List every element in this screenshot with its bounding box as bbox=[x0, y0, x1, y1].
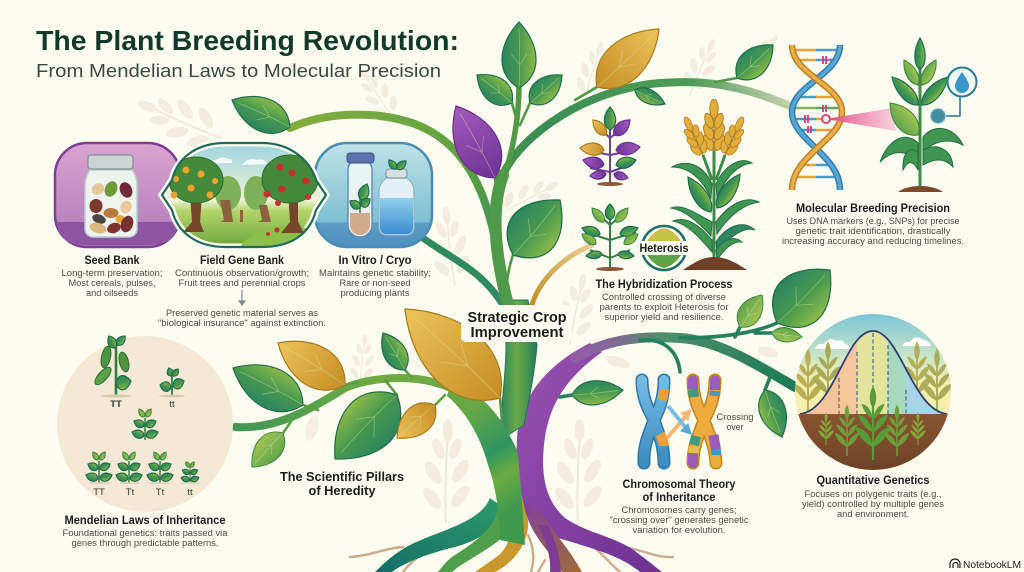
panel: seed bank bbox=[55, 143, 180, 247]
title: The Plant Breeding Revolution: bbox=[36, 25, 459, 56]
text: scientific pillars: of Heredity bbox=[308, 483, 376, 498]
text: biological insurance note: Preserved genetic material serves as bbox=[166, 308, 318, 319]
background ghost sprigs bbox=[129, 27, 788, 522]
branch: in vitro link bbox=[423, 238, 503, 305]
root: teal bbox=[375, 498, 504, 572]
text: mendelian laws bbox=[62, 515, 228, 549]
icon: seed jar bbox=[85, 155, 137, 237]
icon: F1 plant bbox=[131, 408, 159, 440]
icon: crossed chromosome bbox=[693, 380, 716, 463]
branch: lower left bbox=[235, 378, 472, 427]
label: strategic crop improvement bbox=[461, 305, 572, 342]
text: quantitative genetics bbox=[802, 475, 944, 520]
icon: bottle bbox=[379, 158, 414, 235]
text: in vitro cryo bbox=[319, 255, 431, 299]
icon: water drop badge bbox=[930, 68, 976, 124]
icon: molecular plant bbox=[880, 38, 963, 192]
icon: F2 plants bbox=[85, 451, 200, 483]
root: gold bbox=[475, 490, 528, 572]
text: hybridization process bbox=[596, 279, 732, 323]
text: chromosomal theory: of Inheritance bbox=[642, 492, 716, 504]
text: F2 labels: Tt bbox=[156, 487, 165, 498]
text: field gene bank: Continuous observation/growth; bbox=[175, 268, 309, 279]
badge: heterosis bbox=[638, 226, 690, 270]
text: scientific pillars: The Scientific Pillars bbox=[280, 469, 404, 484]
wheat heads bbox=[701, 99, 727, 152]
text: seed bank: and oilseeds bbox=[86, 288, 138, 299]
text: hybridization process: Controlled crossing of diverse bbox=[602, 292, 726, 303]
text: field gene bank: Field Gene Bank bbox=[200, 255, 285, 267]
panel: quantitative genetics circle bbox=[792, 314, 952, 474]
subtitle: From Mendelian Laws to Molecular Precision bbox=[36, 60, 441, 81]
text: quantitative genetics: yield) controlled by multiple genes bbox=[802, 499, 944, 510]
text: F2 labels: TT bbox=[93, 487, 105, 498]
icon: hybrid wheat plant bbox=[671, 99, 759, 270]
icon: green parent plant bbox=[580, 204, 640, 271]
text: biological insurance note: "biological insurance" against extinction. bbox=[158, 318, 326, 329]
text: quantitative genetics: Quantitative Genetics bbox=[816, 475, 930, 487]
text: seed bank: Most cereals, pulses, bbox=[68, 278, 156, 289]
text: hybridization process: superior yield and resilience. bbox=[604, 312, 724, 323]
text: F2 labels bbox=[93, 487, 193, 498]
text: in vitro cryo: Rare or non-seed bbox=[340, 278, 410, 289]
leaves of the tree bbox=[223, 14, 849, 478]
text: scientific pillars bbox=[280, 469, 404, 498]
text: mendelian laws: Foundational genetics: traits passed via bbox=[62, 528, 228, 539]
label: strategic crop improvement: Improvement bbox=[470, 324, 564, 341]
branches bbox=[235, 78, 795, 433]
background wheat bbox=[792, 341, 952, 412]
label: strategic crop improvement: Strategic Crop bbox=[468, 309, 566, 326]
panel: mendelian circle bbox=[57, 334, 233, 512]
branch: top stem bbox=[498, 85, 519, 190]
badge: heterosis: Heterosis bbox=[640, 243, 688, 255]
text: hybridization process: The Hybridization Process bbox=[596, 279, 732, 291]
label: crossing over: over bbox=[726, 422, 744, 433]
arrow: down to insurance note bbox=[239, 290, 245, 305]
text: in vitro cryo: In Vitro / Cryo bbox=[338, 255, 412, 267]
branch: upper right to DNA bbox=[496, 82, 790, 320]
logo: NotebookLM: NotebookLM bbox=[963, 559, 1021, 571]
text: F2 labels: Tt bbox=[126, 487, 135, 498]
icon: purple parent plant bbox=[580, 107, 641, 186]
text: mendelian laws: Mendelian Laws of Inheritance bbox=[64, 515, 226, 527]
branch: purple right bbox=[575, 337, 795, 387]
text: seed bank bbox=[62, 255, 162, 299]
text: mendelian laws: genes through predictable patterns. bbox=[72, 538, 218, 549]
text: molecular breeding precision: Molecular Breeding Precision bbox=[796, 203, 950, 215]
text: in vitro cryo: Maintains genetic stability; bbox=[319, 268, 431, 279]
icon: blue chromosome bbox=[642, 380, 664, 463]
clouds bbox=[815, 337, 931, 349]
wheat leaves bbox=[671, 161, 759, 260]
label: crossing over bbox=[716, 412, 754, 433]
label: crossing over: Crossing bbox=[716, 412, 754, 423]
dna rungs bbox=[794, 50, 838, 177]
text: chromosomal theory: "crossing over" generates genetic bbox=[610, 515, 749, 526]
root: purple brown bbox=[523, 500, 582, 572]
text: TT tt parent labels bbox=[110, 399, 175, 410]
text: seed bank: Long-term preservation; bbox=[62, 268, 162, 279]
text: TT tt parent labels: TT bbox=[110, 399, 122, 410]
text: F2 labels: tt bbox=[187, 487, 193, 498]
panel: field gene bank bbox=[162, 143, 326, 250]
branch: upper left bbox=[290, 115, 505, 305]
root: small purple bbox=[538, 525, 561, 572]
branch: upper right thick base bbox=[496, 175, 512, 320]
text: chromosomal theory: Chromosomal Theory bbox=[622, 479, 736, 491]
bell curve bbox=[800, 331, 947, 415]
text: biological insurance note bbox=[158, 308, 326, 329]
text: field gene bank bbox=[175, 255, 309, 289]
text: molecular breeding precision bbox=[782, 203, 964, 247]
trunk base joined with lower left branch bbox=[447, 386, 525, 545]
text: quantitative genetics: and environment. bbox=[837, 509, 909, 520]
text: hybridization process: parents to exploit Heterosis for bbox=[600, 302, 729, 313]
text: chromosomal theory bbox=[610, 479, 749, 536]
arrows: crossing over bbox=[667, 406, 691, 438]
text: molecular breeding precision: genetic trait identification, drastically bbox=[796, 226, 951, 237]
icon: pink marker beam bbox=[822, 108, 896, 131]
text: in vitro cryo: producing plants bbox=[340, 288, 410, 299]
icon: DNA helix bbox=[792, 45, 842, 190]
icon: short pea plant bbox=[159, 367, 185, 397]
text: chromosomal theory: Chromosomes carry genes; bbox=[622, 505, 736, 516]
text: molecular breeding precision: increasing accuracy and reducing timelines. bbox=[782, 236, 964, 247]
central trunk bbox=[500, 300, 537, 440]
text: seed bank: Seed Bank bbox=[84, 255, 140, 267]
text: TT tt parent labels: tt bbox=[169, 399, 175, 410]
branch: leaf stalks bbox=[495, 78, 737, 420]
icon: tall pea plant bbox=[92, 334, 132, 398]
foreground wheat bbox=[818, 386, 926, 460]
soil bbox=[798, 414, 948, 470]
text: field gene bank: Fruit trees and perennial crops bbox=[178, 278, 306, 289]
panel: in vitro cryo bbox=[315, 143, 432, 247]
text: chromosomal theory: variation for evolution. bbox=[632, 525, 726, 536]
root: purple main bbox=[517, 343, 662, 572]
text: quantitative genetics: Focuses on polygenic traits (e.g., bbox=[804, 489, 942, 500]
branch: hybridization gold link bbox=[532, 245, 592, 305]
icon: test tube bbox=[347, 153, 374, 237]
branch: upper right tip bbox=[560, 323, 777, 397]
branch: lower left stalks bbox=[283, 370, 445, 433]
root: green bbox=[438, 508, 512, 572]
text: molecular breeding precision: Uses DNA markers (e.g., SNPs) for precise bbox=[786, 216, 960, 227]
tree roots bbox=[350, 343, 673, 572]
